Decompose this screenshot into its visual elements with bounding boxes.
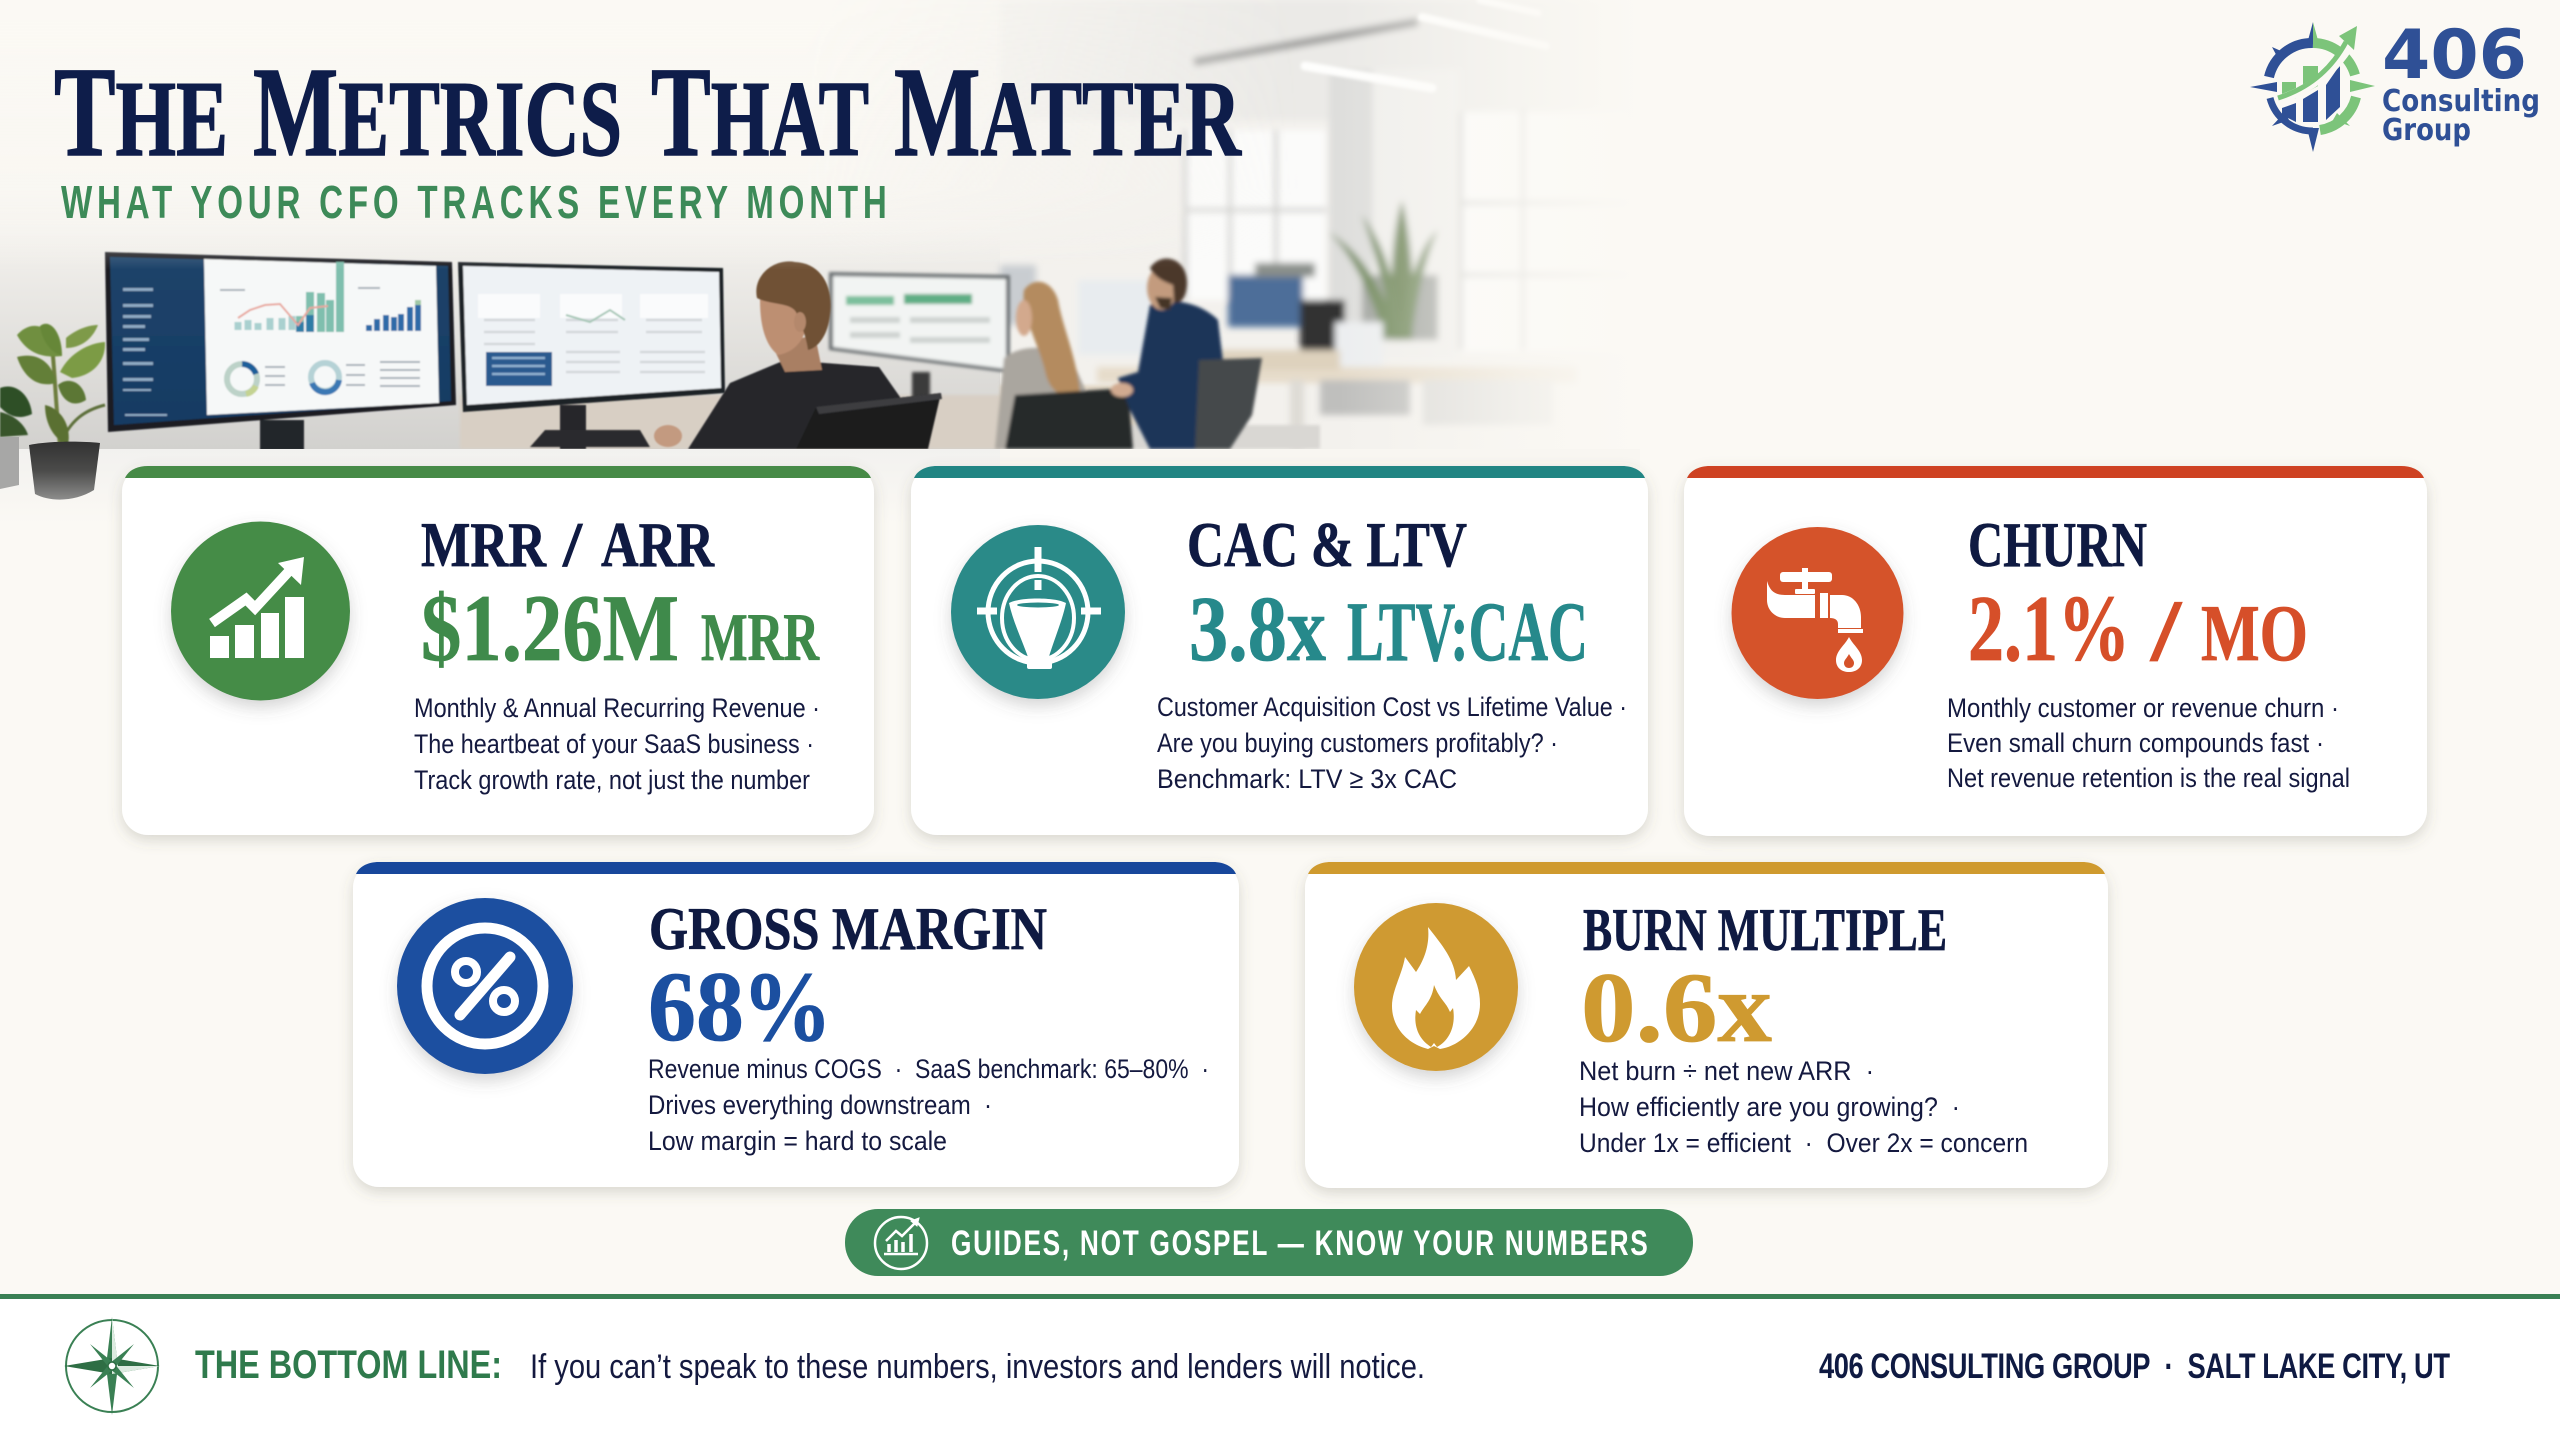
ceiling lights	[1300, 0, 1502, 91]
icon: flame	[1354, 903, 1518, 1071]
description: Low margin = hard to scale	[648, 1126, 947, 1156]
woman	[995, 348, 1092, 449]
title: THE	[54, 41, 228, 183]
logo wordmark: Consulting	[2382, 84, 2540, 119]
description: Are you buying customers profitably? ·	[1157, 728, 1558, 758]
title: THAT	[651, 41, 869, 183]
bottom line text: If you can’t speak to these numbers, investors and lenders will notice.	[530, 1348, 1425, 1386]
logo wordmark	[2382, 16, 2540, 148]
heading: CAC & LTV: CAC & LTV	[1187, 509, 1467, 580]
metric value: 3.8x	[1189, 578, 1326, 681]
description: Customer Acquisition Cost vs Lifetime Value ·	[1157, 692, 1627, 722]
desk surfaces	[460, 385, 1320, 449]
logo wordmark: Group	[2382, 113, 2471, 148]
heading: CHURN: CHURN	[1968, 509, 2147, 580]
plant pots	[0, 437, 100, 500]
heading: BURN MULTIPLE: BURN MULTIPLE	[1583, 897, 1947, 963]
description	[648, 1054, 1209, 1156]
logo compass icon	[2250, 22, 2375, 152]
footer band	[0, 1294, 2560, 1440]
description: Revenue minus COGS · SaaS benchmark: 65–80% ·	[648, 1054, 1209, 1084]
desk plant	[0, 324, 105, 445]
far monitor and colleagues	[829, 259, 1262, 449]
description	[1157, 692, 1627, 794]
metric value: %	[742, 951, 832, 1062]
metric value	[648, 951, 832, 1062]
title: MATTER	[894, 41, 1242, 183]
bar chart on screen	[238, 262, 418, 332]
panel: GROSS MARGIN	[353, 862, 1239, 1187]
office photo banner	[0, 0, 1640, 450]
icon: chart badge	[875, 1217, 927, 1269]
donut charts on screen	[227, 363, 339, 394]
logo: 406 Consulting Group	[2250, 16, 2540, 152]
description: The heartbeat of your SaaS business ·	[414, 729, 814, 759]
description	[1579, 1056, 2028, 1158]
monitor 1	[105, 252, 456, 450]
panel: BURN MULTIPLE	[1305, 862, 2108, 1188]
logo wordmark: 406	[2382, 16, 2527, 95]
description: How efficiently are you growing? ·	[1579, 1092, 1960, 1122]
heading: MRR / ARR	[421, 509, 715, 580]
description: Track growth rate, not just the number	[414, 765, 810, 795]
icon: percent	[397, 898, 573, 1074]
man at monitors	[654, 261, 942, 449]
metric value: $1.26M	[421, 575, 679, 681]
heading: MRR / ARR: ARR	[601, 509, 715, 580]
icon: growth chart	[171, 522, 350, 700]
title: METRICS	[253, 41, 622, 183]
heading: MRR / ARR: /	[562, 509, 583, 580]
description: Monthly & Annual Recurring Revenue ·	[414, 693, 820, 723]
description	[1947, 693, 2350, 793]
background office	[998, 14, 1546, 426]
company and location: 406 CONSULTING GROUP · SALT LAKE CITY, UT	[1819, 1347, 2450, 1386]
icon: compass rose	[64, 1317, 160, 1415]
heading: GROSS MARGIN: GROSS MARGIN	[649, 896, 1047, 962]
subtitle: WHAT YOUR CFO TRACKS EVERY MONTH	[61, 178, 887, 228]
description: Net revenue retention is the real signal	[1947, 763, 2350, 793]
description: Even small churn compounds fast ·	[1947, 728, 2324, 758]
title	[54, 41, 1242, 183]
callout text: GUIDES, NOT GOSPEL — KNOW YOUR NUMBERS	[951, 1223, 1648, 1263]
panel: CAC & LTV	[911, 466, 1648, 835]
bottom line label: THE BOTTOM LINE:	[195, 1343, 502, 1387]
metric value: /	[2150, 583, 2183, 680]
description: Net burn ÷ net new ARR ·	[1579, 1056, 1874, 1086]
description	[414, 693, 820, 795]
metric value	[1968, 577, 2308, 681]
description: Benchmark: LTV ≥ 3x CAC	[1157, 764, 1457, 794]
heading: MRR / ARR: MRR	[421, 509, 547, 580]
man at back	[1118, 301, 1227, 449]
desk band under photo	[0, 449, 1640, 524]
metric value: MRR	[701, 599, 820, 675]
panel: CHURN	[1684, 466, 2427, 836]
metric value: MO	[2201, 590, 2308, 678]
monitor 2	[458, 262, 725, 449]
icon: funnel target	[951, 525, 1125, 699]
callout pill	[845, 1209, 1693, 1276]
top and right fade overlays	[0, 0, 1641, 460]
description: Monthly customer or revenue churn ·	[1947, 693, 2339, 723]
panel: MRR / ARR	[122, 466, 874, 835]
metric value: LTV:CAC	[1347, 585, 1588, 679]
metric value	[1189, 578, 1588, 681]
description: Drives everything downstream ·	[648, 1090, 992, 1120]
metric value: 0.6x	[1581, 952, 1772, 1063]
description: Under 1x = efficient · Over 2x = concern	[1579, 1128, 2028, 1158]
metric value: 2.1%	[1968, 577, 2130, 681]
icon: dripping faucet	[1732, 527, 1904, 699]
metric value: 68	[648, 951, 744, 1062]
